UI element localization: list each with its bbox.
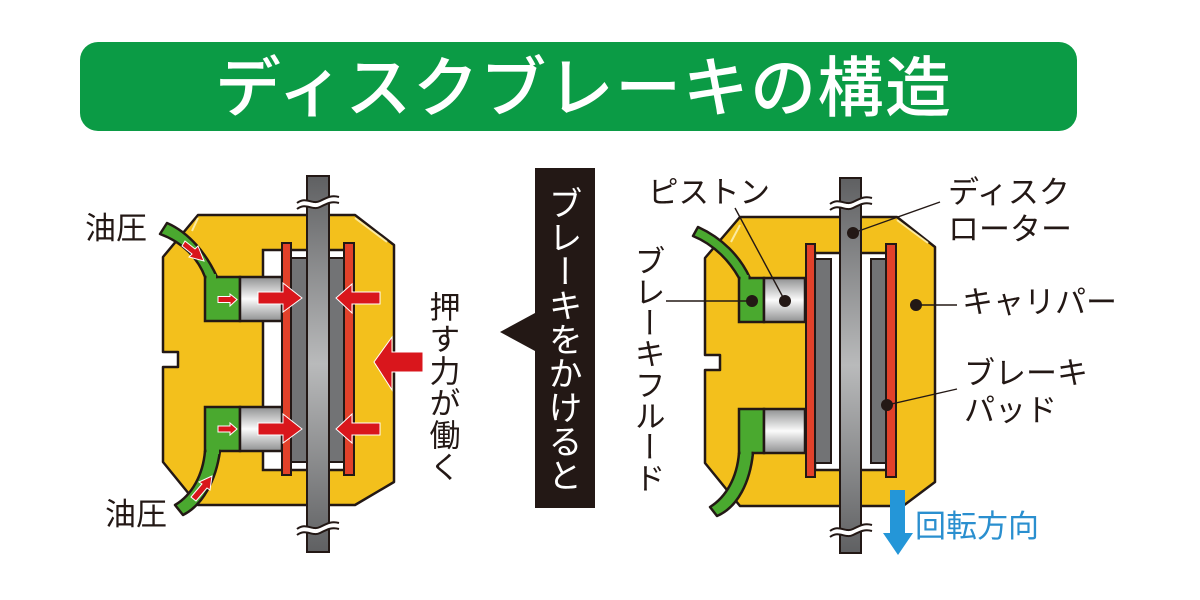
leader dots [746,227,922,411]
pipe joints [740,275,752,456]
brake fluid pipe lower [175,451,220,515]
rotor break marks [830,197,872,537]
brake fluid pipe upper [160,223,217,277]
label: rotor: ローター [948,212,1072,247]
label: rotation direction: 回転方向 [915,509,1039,544]
label: pushing force: 押す力が働く [424,291,460,483]
title: ディスクブレーキの構造 [215,51,951,125]
piston upper [764,278,805,322]
brake fluid pipe lower [710,453,753,516]
brake pads [282,243,354,475]
diagram: brake applied [85,176,460,552]
brake fluid chamber upper [205,277,240,321]
pipe joints [206,274,219,454]
label: oil pressure top: 油圧 [85,211,147,246]
piston upper [240,277,282,321]
leader lines [666,202,957,405]
callout: when brake applied [500,168,595,508]
caliper [163,215,394,505]
piston lower [764,409,805,453]
disc rotor [307,176,329,552]
title banner [80,42,1077,131]
label: oil pressure bottom: 油圧 [105,497,167,532]
label: pad: パッド [964,393,1057,428]
label: brake fluid: ブレーキフルード [630,245,664,493]
brake fluid chamber lower [205,407,240,451]
disc rotor [840,178,861,553]
piston lower [240,407,282,451]
brake fluid chamber lower [739,409,764,453]
rotor break marks [297,196,339,535]
brake fluid pipe upper [693,227,750,278]
brake pads [806,244,896,477]
caliper [705,217,935,506]
caliper cavity [815,253,887,470]
callout text: ブレーキをかけると [543,186,581,492]
label: brake: ブレーキ [964,356,1088,391]
caliper highlight [192,218,387,242]
arrow: rotation direction [883,490,913,555]
brake fluid chamber upper [739,278,764,322]
caliper cavity [263,250,345,470]
caliper highlight [731,220,928,243]
label: disc: ディスク [948,175,1070,210]
label: piston: ピストン [648,176,770,210]
diagram: brake released [630,175,1117,555]
force arrows [182,241,423,501]
label: caliper: キャリパー [962,285,1117,320]
